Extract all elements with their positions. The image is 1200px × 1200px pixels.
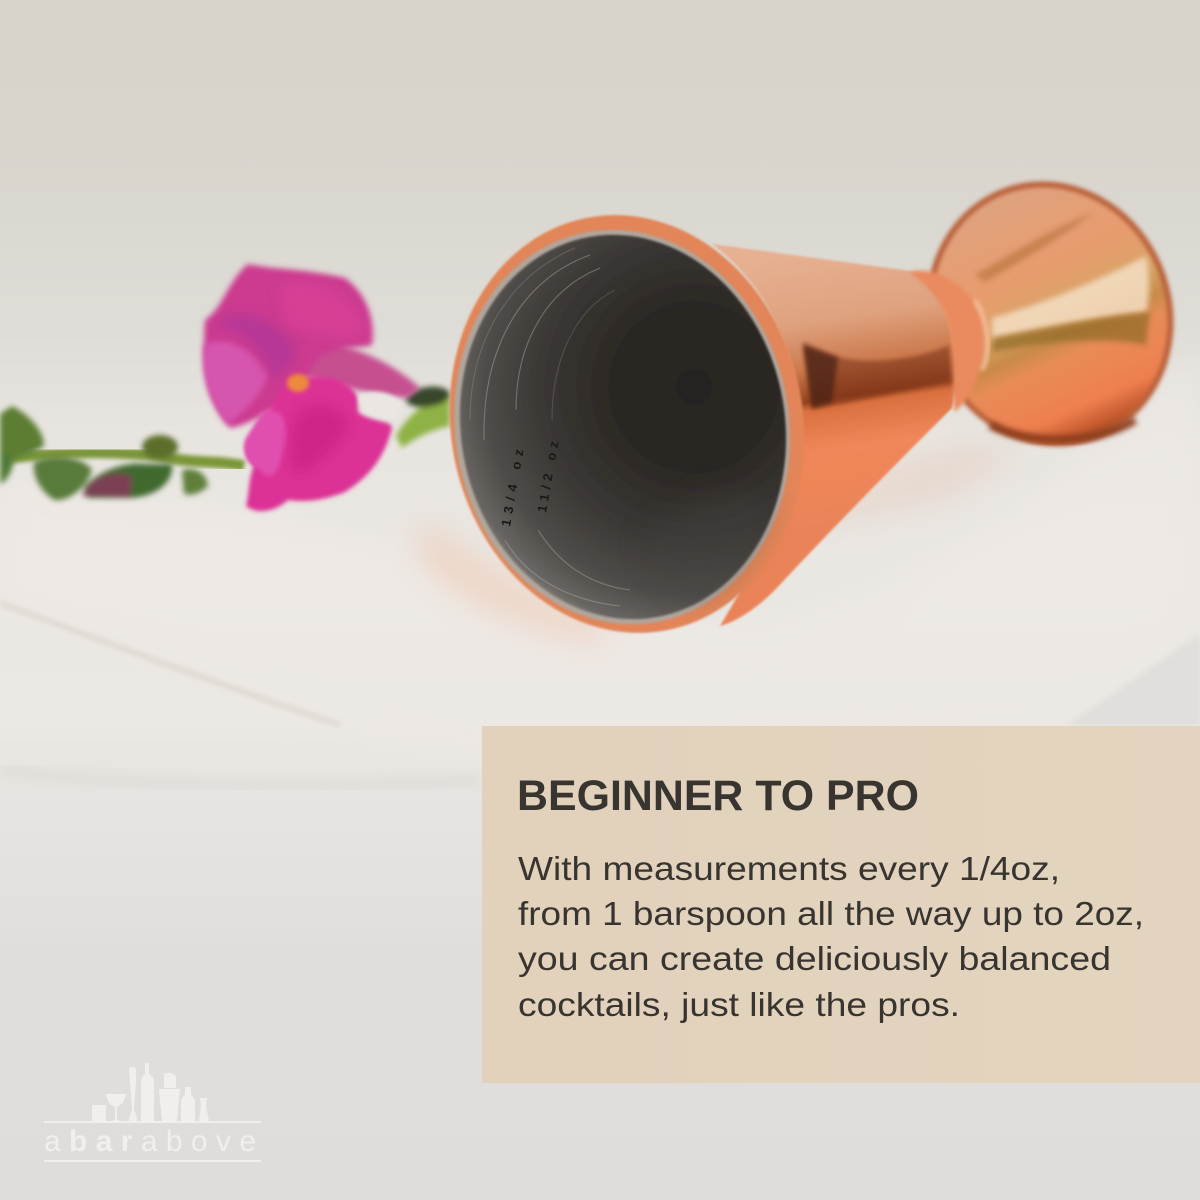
panel background <box>482 726 1200 1083</box>
upper petal <box>204 264 373 428</box>
lower petal <box>246 376 392 511</box>
jigger waist ring <box>910 271 987 412</box>
jigger main cone <box>712 244 955 626</box>
jigger large rim <box>414 184 840 664</box>
orange stamen <box>287 374 309 392</box>
body copy <box>518 850 1144 1023</box>
1 3/4 oz marking: 13/4 oz <box>498 448 527 528</box>
line 2: from 1 barspoon all the way up to 2oz, <box>518 895 1144 932</box>
petal gap <box>358 392 402 418</box>
small cup highlight <box>992 256 1149 338</box>
jigger interior <box>430 209 816 645</box>
line 3: you can create deliciously balanced <box>518 940 1111 977</box>
heading: BEGINNER TO PRO <box>517 772 919 820</box>
line 1: With measurements every 1/4oz, <box>518 850 1060 887</box>
logo bottles <box>92 1063 209 1121</box>
logo upper line <box>44 1121 261 1123</box>
1 1/2 oz marking: 11/2 oz <box>534 440 562 514</box>
cone reflection <box>803 342 950 410</box>
stem <box>10 452 244 466</box>
leaves and buds <box>0 384 451 500</box>
logo lower line <box>44 1160 261 1162</box>
text panel <box>482 726 1200 1083</box>
rim inner silver edge <box>423 203 821 651</box>
logo <box>44 1063 261 1162</box>
jigger small cup <box>890 146 1200 482</box>
copper jigger <box>414 146 1200 664</box>
flower and stem <box>0 264 451 511</box>
pink tube <box>300 340 420 398</box>
logo wordmark: a bar above <box>44 1125 256 1158</box>
inner grey sheen <box>640 492 770 600</box>
interior measurement rings <box>470 248 630 606</box>
engraved measurements <box>498 440 562 528</box>
line 4: cocktails, just like the pros. <box>518 986 960 1023</box>
